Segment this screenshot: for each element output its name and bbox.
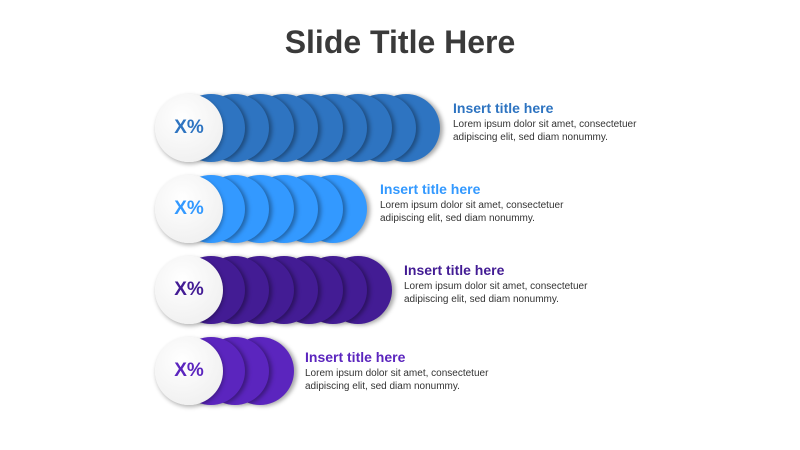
text 1: Insert title here xyxy=(453,100,553,116)
text 4: Lorem ipsum dolor sit amet, consectetuer xyxy=(305,368,488,379)
row 1 xyxy=(154,92,446,166)
text 2 xyxy=(380,181,564,224)
text 1 xyxy=(453,100,636,143)
text 1: adipiscing elit, sed diam nonummy. xyxy=(453,132,608,143)
row 3: X% xyxy=(174,279,204,300)
text 3 xyxy=(404,262,588,305)
text 2: Insert title here xyxy=(380,181,480,197)
text 1: Lorem ipsum dolor sit amet, consectetuer xyxy=(453,119,636,130)
text 3: Insert title here xyxy=(404,262,504,278)
text 4: Insert title here xyxy=(305,349,405,365)
text 4: adipiscing elit, sed diam nonummy. xyxy=(305,381,460,392)
text 2: adipiscing elit, sed diam nonummy. xyxy=(380,213,535,224)
row 4 xyxy=(154,336,300,410)
text 2: Lorem ipsum dolor sit amet, consectetuer xyxy=(380,200,563,211)
text 4 xyxy=(305,349,488,392)
text 3: Lorem ipsum dolor sit amet, consectetuer xyxy=(404,281,587,292)
row 4: X% xyxy=(174,360,204,381)
row 2: X% xyxy=(174,198,204,219)
row 1: X% xyxy=(174,117,204,138)
title: Slide Title Here xyxy=(285,24,515,60)
row 2 xyxy=(154,174,372,248)
row 3 xyxy=(154,254,398,328)
text 3: adipiscing elit, sed diam nonummy. xyxy=(404,294,559,305)
